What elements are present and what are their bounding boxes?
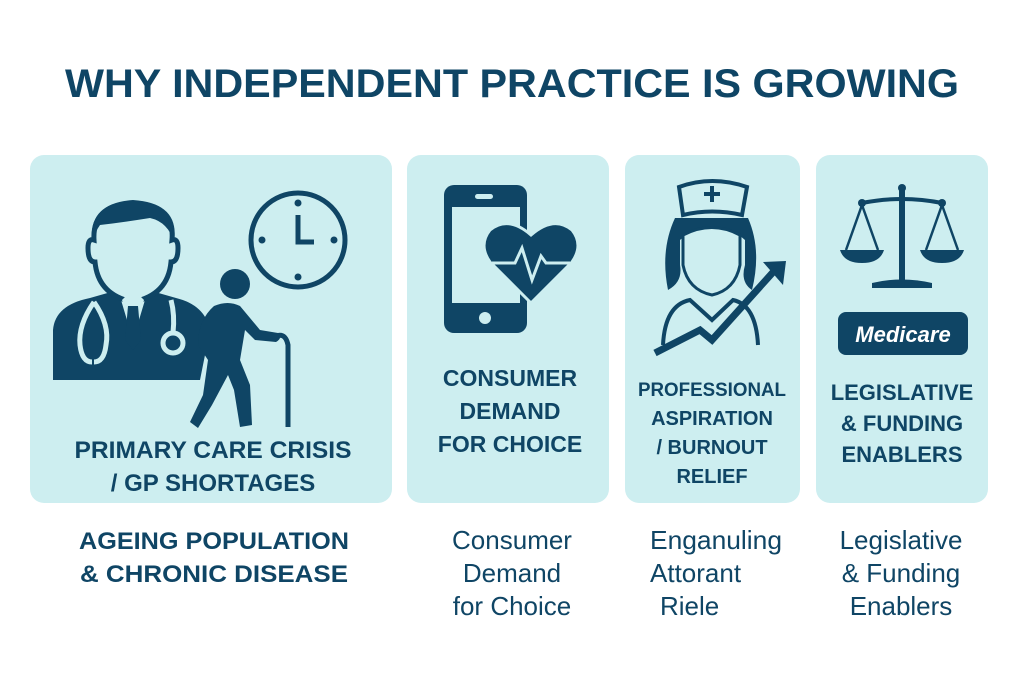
caption: ageing population bbox=[79, 528, 349, 588]
panel label: PRIMARY CARE CRISIS bbox=[74, 437, 352, 464]
caption: consumer demand: for Choice bbox=[453, 591, 571, 621]
panel: consumer demand: FOR CHOICE bbox=[438, 431, 582, 457]
icon: scales of justice bbox=[840, 184, 964, 288]
panel: legislative enablers: & FUNDING bbox=[841, 411, 963, 436]
title: WHY INDEPENDENT PRACTICE IS GROWING bbox=[65, 62, 959, 106]
caption: consumer demand: Demand bbox=[463, 558, 561, 588]
caption: consumer demand: Consumer bbox=[452, 525, 572, 555]
panel label: PROFESSIONAL bbox=[638, 380, 786, 401]
panel: consumer demand: DEMAND bbox=[460, 398, 560, 424]
panel: primary care crisis: / GP SHORTAGES bbox=[111, 470, 315, 497]
panel: professional aspiration bbox=[625, 155, 800, 503]
panel: legislative enablers bbox=[816, 155, 988, 503]
icon: elderly person with cane bbox=[190, 269, 288, 428]
icon: doctor bbox=[53, 200, 210, 380]
panel label: CONSUMER bbox=[443, 365, 577, 391]
caption: professional bbox=[650, 525, 782, 621]
caption: ageing population: & CHRONIC DISEASE bbox=[80, 561, 348, 588]
icon: nurse with rising arrow bbox=[655, 181, 786, 353]
panel: professional aspiration: RELIEF bbox=[676, 466, 748, 488]
caption: legislative: & Funding bbox=[842, 558, 960, 588]
panel label: LEGISLATIVE bbox=[831, 380, 973, 405]
caption: professional: Enganuling bbox=[650, 525, 782, 555]
panel: legislative enablers: ENABLERS bbox=[841, 442, 963, 467]
panel: consumer demand bbox=[407, 155, 609, 503]
caption: legislative: Legislative bbox=[840, 525, 962, 555]
caption: ageing population: AGEING POPULATION bbox=[79, 528, 349, 555]
caption: professional: Riele bbox=[660, 591, 719, 621]
medicare badge: Medicare bbox=[855, 322, 951, 347]
panel: professional aspiration: / BURNOUT bbox=[656, 437, 768, 459]
medicare badge bbox=[838, 312, 968, 355]
icon: clock bbox=[251, 193, 345, 287]
caption: legislative: Enablers bbox=[850, 591, 952, 621]
icon: phone with heart bbox=[444, 185, 578, 333]
caption: consumer demand bbox=[452, 525, 572, 621]
panel: professional aspiration: ASPIRATION bbox=[651, 408, 773, 430]
caption: legislative bbox=[840, 525, 962, 621]
caption: professional: Attorant bbox=[650, 558, 742, 588]
panel: primary care crisis bbox=[30, 155, 392, 503]
